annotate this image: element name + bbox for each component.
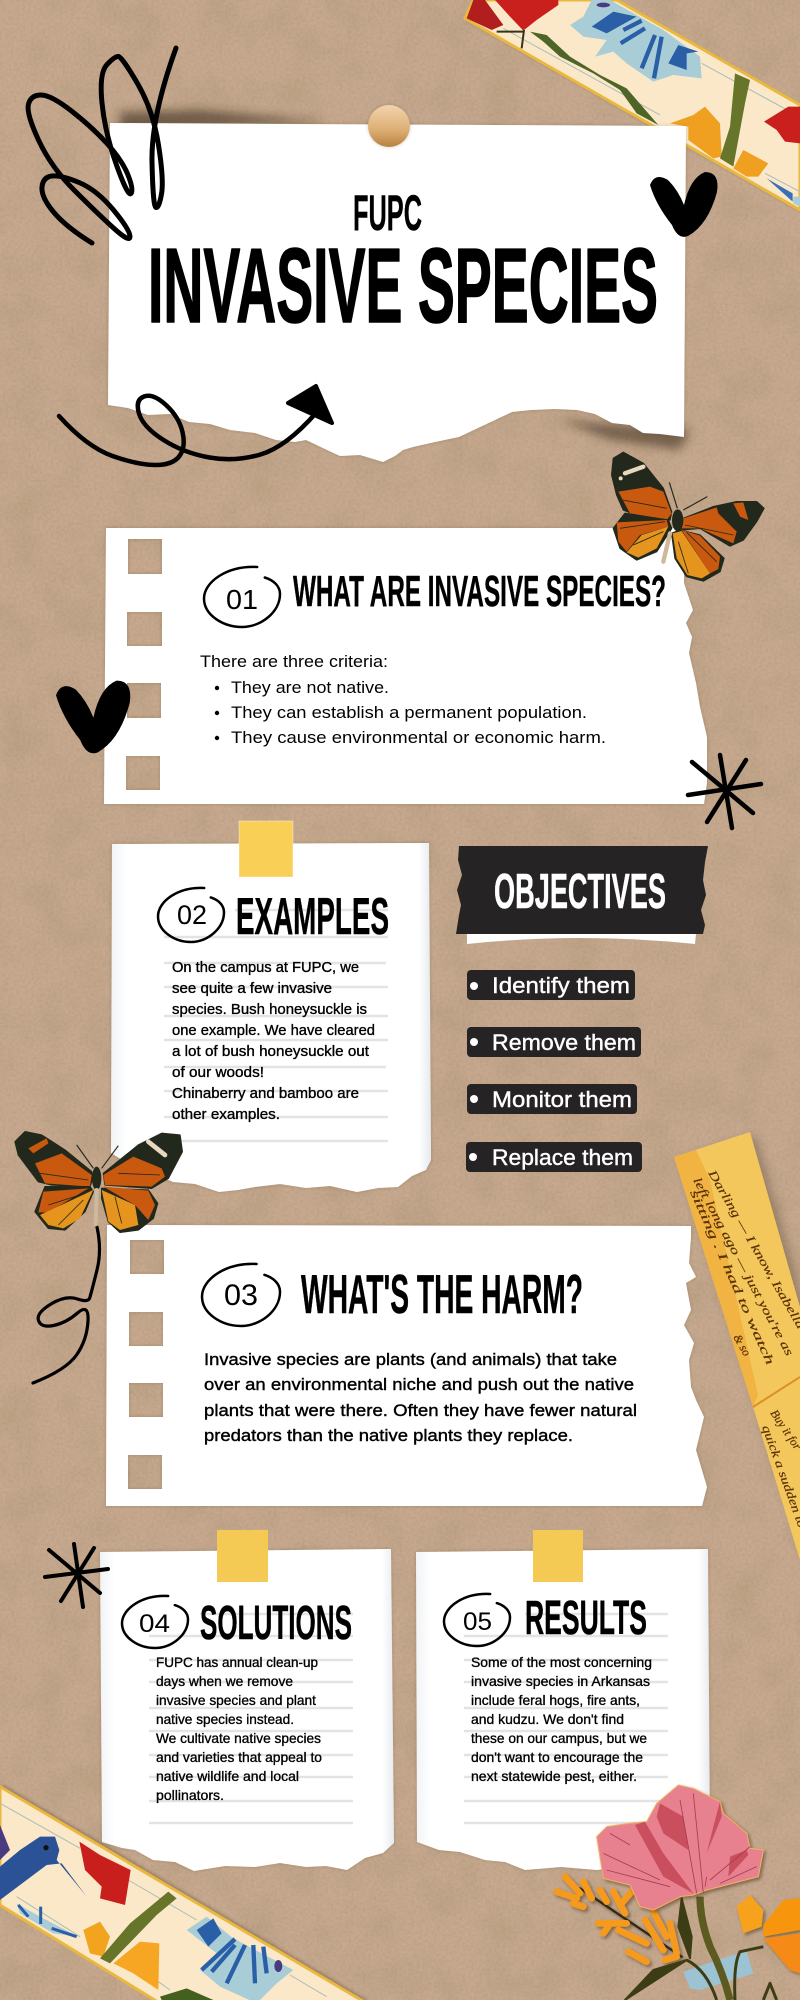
body text: other examples. — [172, 1107, 280, 1123]
body text: these on our campus, but we — [471, 1731, 647, 1746]
number badge 01: 01 — [226, 584, 258, 615]
body text — [471, 1655, 652, 1784]
objective: replace them — [466, 1142, 642, 1172]
body text: of our woods! — [172, 1065, 264, 1081]
body text: over an environmental niche and push out the native — [204, 1375, 634, 1394]
stems and leaves — [625, 1897, 777, 2000]
number badge 04 — [122, 1596, 188, 1648]
ruled lines — [149, 1614, 353, 1823]
number badge 04: 04 — [139, 1610, 170, 1638]
tape — [217, 1530, 268, 1582]
objective: replace them: Replace them — [492, 1145, 633, 1170]
criteria list — [200, 652, 606, 747]
body text: native species instead. — [156, 1712, 294, 1727]
handwritten letter strip: sitting . I had to watch — [687, 1188, 777, 1367]
icon: heart top right — [650, 172, 718, 237]
heading: SOLUTIONS — [200, 1597, 352, 1650]
panel: what are invasive species — [104, 528, 707, 804]
body text: plants that were there. Often they have fewer natural — [204, 1401, 637, 1420]
body text: We cultivate native species — [156, 1731, 321, 1746]
objective: monitor them: Monitor them — [492, 1087, 632, 1112]
red tulips — [495, 0, 558, 31]
objective: identify them — [467, 970, 635, 1000]
number badge 02 — [158, 888, 224, 942]
icon: heart left — [56, 681, 130, 753]
icon: asterisk left — [45, 1544, 108, 1607]
objective: remove them: Remove them — [492, 1030, 636, 1055]
body text: species. Bush honeysuckle is — [172, 1002, 367, 1018]
floral washi tape: top right — [465, 0, 800, 212]
number badge 03 — [202, 1264, 280, 1326]
icon: butterfly left — [15, 1132, 182, 1232]
body text: one example. We have cleared — [172, 1023, 375, 1039]
handwritten letter strip: quick a sudden to — [759, 1423, 800, 1530]
icon: butterfly top right — [612, 452, 764, 581]
objectives banner — [456, 846, 708, 944]
tape — [239, 821, 293, 877]
objective: identify them: Identify them — [492, 973, 630, 998]
number badge 05 — [444, 1594, 510, 1646]
body text: include feral hogs, fire ants, — [471, 1693, 640, 1708]
tape — [533, 1530, 583, 1582]
body text — [156, 1655, 322, 1803]
body text: On the campus at FUPC, we — [172, 960, 359, 976]
icon: asterisk right — [688, 755, 761, 828]
orange flower — [737, 1895, 800, 1973]
handwritten letter strip: Darling — I know, Isabella — [705, 1166, 800, 1331]
handwritten letter strip: left long ago — just you're as — [690, 1175, 797, 1358]
objective: remove them — [467, 1027, 641, 1057]
long stem — [530, 32, 658, 125]
blue flower — [570, 0, 702, 82]
panel: results note — [416, 1530, 710, 1870]
body text: FUPC has annual clean-up — [156, 1655, 318, 1670]
body text: Chinaberry and bamboo are — [172, 1086, 359, 1102]
body text: and kudzu. We don't find — [471, 1712, 624, 1727]
body text: pollinators. — [156, 1788, 224, 1803]
body text: don't want to encourage the — [471, 1750, 643, 1765]
number badge 02: 02 — [177, 900, 207, 930]
body text — [204, 1350, 637, 1445]
panel: examples note — [111, 821, 431, 1192]
body text: and varieties that appeal to — [156, 1750, 322, 1765]
ruled lines — [464, 1614, 668, 1823]
panel: what's the harm — [106, 1225, 707, 1506]
pink flower — [597, 1785, 763, 1910]
blue flower — [187, 1917, 293, 2000]
number badge 03: 03 — [224, 1279, 258, 1312]
body text: native wildlife and local — [156, 1769, 299, 1784]
red flower — [79, 1842, 131, 1905]
icon: push pin — [368, 105, 410, 147]
eyebrow: FUPC: FUPC — [353, 185, 422, 241]
body text: days when we remove — [156, 1674, 293, 1689]
heading: EXAMPLES — [236, 888, 389, 946]
body text: Invasive species are plants (and animals) that take — [204, 1350, 617, 1369]
doodle: butterfly trail — [33, 1227, 100, 1383]
body text: invasive species and plant — [156, 1693, 316, 1708]
doodle: loops top left — [28, 48, 176, 243]
heading: RESULTS — [525, 1592, 647, 1645]
ruled lines — [164, 910, 388, 1141]
arrow: curly arrow on title — [59, 386, 332, 465]
orange flower — [83, 1922, 110, 1957]
handwritten letter strip: & so — [730, 1332, 754, 1358]
orange sprig — [557, 1877, 682, 1962]
body text: a lot of bush honeysuckle out — [172, 1044, 369, 1060]
body text — [172, 960, 375, 1123]
body text: predators than the native plants they replace. — [204, 1426, 573, 1445]
heading: OBJECTIVES — [494, 865, 666, 919]
body text: Some of the most concerning — [471, 1655, 652, 1670]
body text: see quite a few invasive — [172, 981, 332, 997]
illustration: flowers bottom right — [557, 1785, 800, 2000]
panel: title paper — [108, 110, 690, 462]
number badge 05: 05 — [463, 1608, 492, 1636]
criteria list: They can establish a permanent population. — [231, 703, 587, 722]
handwritten letter strip — [674, 1132, 800, 1563]
criteria list: There are three criteria: — [200, 652, 388, 671]
criteria list: They are not native. — [231, 678, 389, 697]
floral washi tape: bottom left — [0, 1785, 369, 2000]
criteria list: They cause environmental or economic harm. — [231, 728, 606, 747]
body text: invasive species in Arkansas — [471, 1674, 650, 1689]
number badge 01 — [204, 567, 280, 627]
body text: next statewide pest, either. — [471, 1769, 637, 1784]
panel: solutions note — [100, 1530, 394, 1871]
orange petals — [670, 107, 722, 158]
objective: monitor them — [467, 1084, 637, 1114]
blue tape — [683, 1952, 753, 1990]
hummingbird — [0, 1825, 10, 1860]
